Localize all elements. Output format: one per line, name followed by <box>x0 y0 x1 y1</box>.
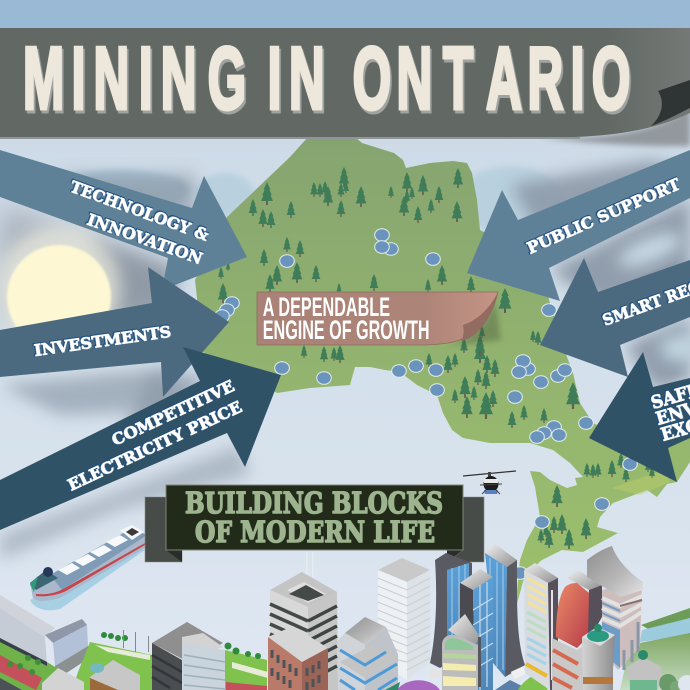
banner heading: OF MODERN LIFE <box>195 515 435 549</box>
arrow: technology and innovation: TECHNOLOGY & <box>68 177 212 245</box>
city: small round tower with rooftop trees <box>627 650 662 690</box>
city: brick building <box>268 626 328 690</box>
arrow: investments: INVESTMENTS <box>33 322 172 360</box>
arrow: safety and environmental excellence <box>589 352 690 482</box>
sun <box>0 226 121 350</box>
building blocks banner <box>145 485 484 562</box>
city: yellow striped tower <box>524 563 558 690</box>
city: curved-roof tower <box>587 546 643 670</box>
right shoreline with hills and water <box>620 608 690 690</box>
city: striped grey tower <box>270 552 338 690</box>
arrow: competitive electricity price: COMPETITIVE <box>109 376 237 450</box>
city: purple dome and gardens <box>385 674 548 690</box>
city: park with trees <box>42 630 152 690</box>
city: blue glass towers <box>430 544 526 690</box>
arrow: smart regulation <box>540 249 690 377</box>
arrow: competitive electricity price: ELECTRICITY PRICE <box>65 397 245 495</box>
top sky band <box>0 0 690 30</box>
helicopter <box>463 471 516 494</box>
arrow: public support: PUBLIC SUPPORT <box>524 174 683 258</box>
banner curl <box>651 80 690 126</box>
clouds and arrow haze <box>0 160 690 560</box>
yellow speckle area on the map <box>612 470 670 495</box>
city: left waterfront <box>0 595 98 690</box>
ribbon text: A DEPENDABLE <box>263 292 390 322</box>
city: white tower <box>378 558 430 680</box>
banner heading: BUILDING BLOCKS <box>185 486 443 520</box>
city: round cream building <box>442 614 481 690</box>
ribbon: a dependable engine of growth <box>257 292 501 348</box>
city: dark office with pale wing <box>152 622 268 690</box>
city: layered blue low-rise <box>338 617 398 690</box>
city: hexagonal tower with rooftop trees <box>582 624 615 690</box>
arrow: technology and innovation: INNOVATION <box>85 210 205 268</box>
title text: MINING IN ONTARIO <box>23 30 630 128</box>
map lake markers <box>215 229 637 579</box>
arrow: technology and innovation <box>0 150 247 290</box>
ribbon text <box>263 292 430 345</box>
arrow: competitive electricity price <box>0 347 281 530</box>
arrow: investments <box>0 267 229 397</box>
ribbon text: ENGINE OF GROWTH <box>263 315 430 345</box>
title banner <box>0 28 690 146</box>
city: red curved tower <box>552 570 602 690</box>
map trees <box>218 167 668 549</box>
ship <box>30 525 147 610</box>
arrow: public support <box>467 150 690 301</box>
map: Ontario <box>195 137 690 610</box>
